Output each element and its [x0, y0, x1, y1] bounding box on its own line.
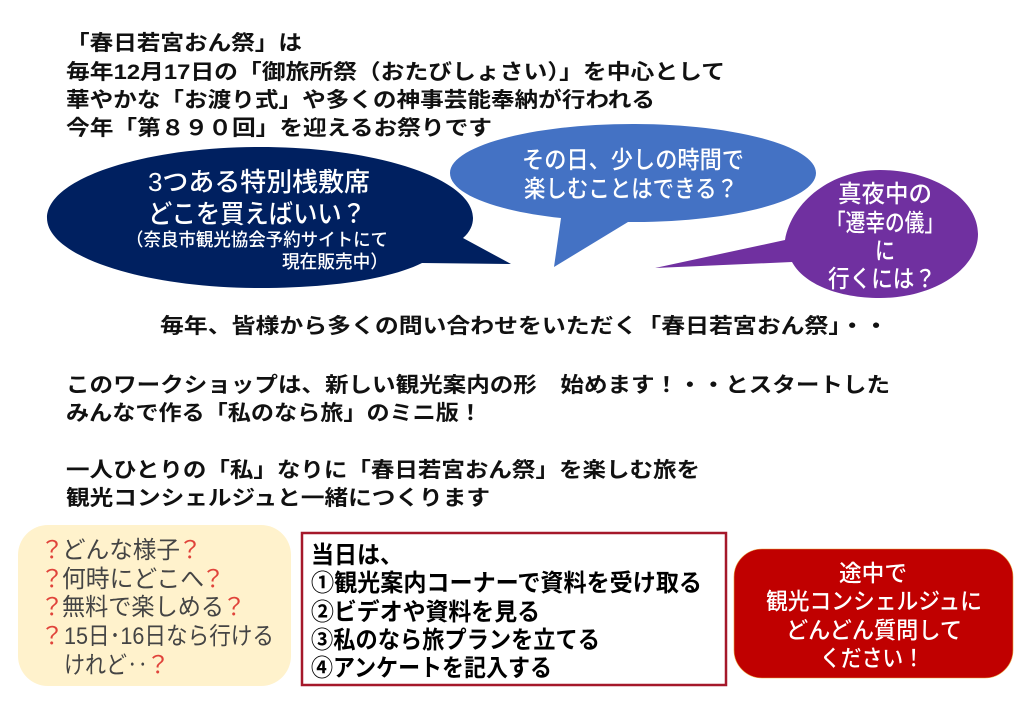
speech bubble: midnight ritual [655, 170, 978, 298]
speech bubble: special seats: （奈良市観光協会予約サイトにて [126, 230, 388, 250]
panel: visitor questions: ？ [40, 566, 64, 593]
speech bubble: midnight ritual: 行くには？ [828, 266, 936, 293]
middle text block: 毎年、皆様から多くの問い合わせをいただく「春日若宮おん祭」・・ [160, 315, 888, 338]
intro text block: 今年「第８９０回」を迎えるお祭りです [66, 117, 492, 140]
panel: schedule steps: ①観光案内コーナーで資料を受け取る [311, 570, 702, 597]
speech bubble: special seats: 3つある特別桟敷席 [148, 167, 370, 197]
middle text block: 一人ひとりの「私」なりに「春日若宮おん祭」を楽しむ旅を [66, 459, 700, 482]
panel: visitor questions: ？ [146, 652, 170, 679]
callout: ask the concierge: ください！ [820, 645, 924, 671]
panel: visitor questions: ？ [40, 537, 64, 564]
speech bubble: short visit [450, 124, 816, 267]
panel: visitor questions: ？ [40, 623, 64, 650]
callout: ask the concierge: どんどん質問して [786, 617, 962, 643]
callout: ask the concierge: 観光コンシェルジュに [766, 588, 982, 614]
intro text block: 「春日若宮おん祭」は [66, 32, 302, 55]
panel: schedule steps: 当日は、 [311, 542, 403, 569]
speech bubble: special seats: どこを買えばいい？ [148, 199, 366, 229]
speech bubble: short visit: 楽しむことはできる？ [524, 176, 738, 203]
speech bubble: midnight ritual: 真夜中の [838, 181, 932, 208]
middle text block [66, 315, 890, 510]
panel: visitor questions: ？ [178, 537, 202, 564]
panel: schedule steps: ③私のなら旅プランを立てる [311, 627, 600, 654]
panel: visitor questions: 15日･16日なら行ける [64, 623, 274, 650]
panel: visitor questions: けれど‥ [64, 652, 148, 679]
panel: visitor questions: どんな様子 [62, 537, 180, 564]
intro text block: 華やかな「お渡り式」や多くの神事芸能奉納が行われる [66, 88, 655, 112]
callout: ask the concierge: 途中で [839, 560, 907, 586]
middle text block: このワークショップは、新しい観光案内の形 始めます！・・とスタートした [66, 374, 890, 397]
speech bubble: midnight ritual: 「遷幸の儀」 [826, 210, 944, 237]
panel: schedule steps [302, 533, 726, 685]
panel: visitor questions: ？ [40, 594, 64, 621]
intro text block: 毎年12月17日の「御旅所祭（おたびしょさい）」を中心として [66, 61, 725, 84]
middle text block: 観光コンシェルジュと一緒につくります [66, 487, 490, 510]
panel: visitor questions: ？ [201, 566, 225, 593]
panel: schedule steps: ④アンケートを記入する [311, 655, 552, 682]
speech bubble: short visit: その日、少しの時間で [522, 147, 744, 174]
intro text block [66, 32, 725, 140]
speech bubble: midnight ritual: に [875, 238, 895, 265]
panel: schedule steps: ②ビデオや資料を見る [311, 598, 540, 626]
panel: visitor questions [18, 525, 291, 686]
panel: visitor questions: ？ [222, 594, 246, 621]
speech bubble: special seats: 現在販売中） [282, 252, 388, 272]
callout: ask the concierge [734, 549, 1013, 678]
middle text block: みんなで作る「私のなら旅」のミニ版！ [66, 402, 482, 425]
speech bubble: special seats [47, 147, 511, 288]
panel: visitor questions: 無料で楽しめる [62, 594, 224, 621]
panel: visitor questions: 何時にどこへ [62, 566, 204, 593]
